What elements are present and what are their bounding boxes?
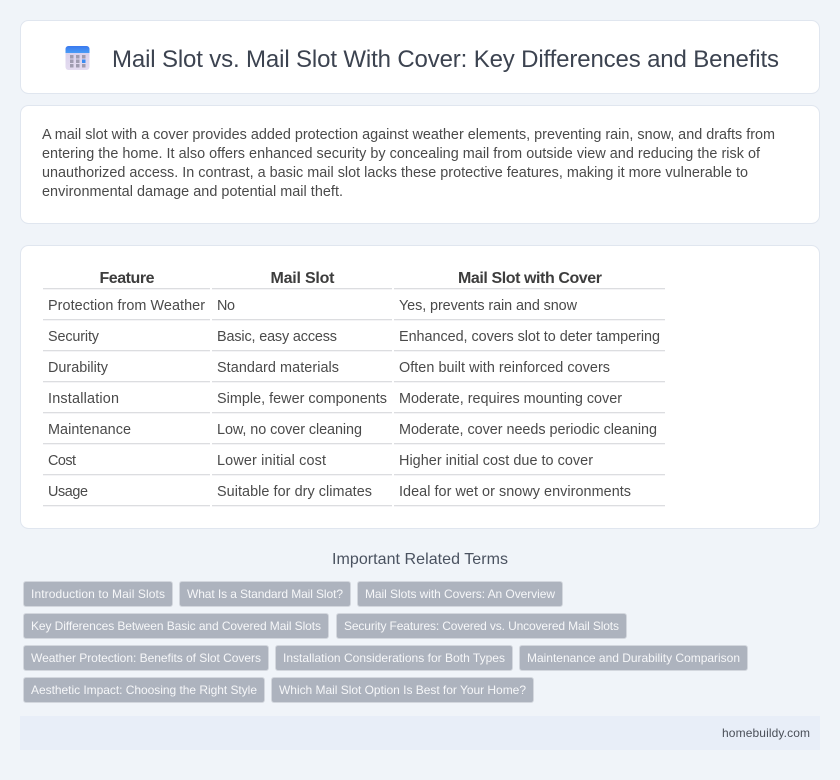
panel: intro text: unauthorized access. In contrast, a basic mail slot lacks these protective features, making it more vulnerable to <box>42 165 748 181</box>
row: security: Basic, easy access <box>217 329 337 345</box>
row: security: Enhanced, covers slot to deter tampering <box>399 329 660 345</box>
table header: Feature <box>100 270 155 287</box>
tag: Installation Considerations for Both Types <box>283 651 505 665</box>
tag: Introduction to Mail Slots <box>31 587 165 601</box>
row: maintenance: Low, no cover cleaning <box>217 422 362 438</box>
row: usage: Ideal for wet or snowy environments <box>399 484 631 500</box>
row: cost: Lower initial cost <box>217 453 326 469</box>
table header: Mail Slot <box>270 270 335 287</box>
row: maintenance: Maintenance <box>48 422 131 438</box>
icon: calendar <box>66 46 90 70</box>
panel: intro text: environmental damage and potential mail theft. <box>42 184 343 200</box>
tag <box>276 646 512 670</box>
footer <box>20 716 820 750</box>
row: installation: Installation <box>48 391 119 407</box>
tag: Maintenance and Durability Comparison <box>527 651 740 665</box>
tag <box>180 582 350 606</box>
tag: Weather Protection: Benefits of Slot Covers <box>31 651 261 665</box>
tag: Mail Slots with Covers: An Overview <box>365 587 555 601</box>
row: security: Security <box>48 329 100 345</box>
row: cost: Higher initial cost due to cover <box>399 453 593 469</box>
tag: Key Differences Between Basic and Covered Mail Slots <box>31 619 321 633</box>
tag: Aesthetic Impact: Choosing the Right Style <box>31 683 257 697</box>
row: usage: Usage <box>48 484 88 500</box>
table header: Mail Slot with Cover <box>458 270 602 287</box>
row: durability <box>48 360 610 376</box>
row: durability: Durability <box>48 360 109 376</box>
panel: header <box>20 20 820 94</box>
tag <box>24 582 172 606</box>
tag <box>24 678 264 702</box>
row: cost: Cost <box>48 453 76 469</box>
row: installation: Moderate, requires mounting cover <box>399 391 622 407</box>
table rules <box>43 288 665 506</box>
row: protection from weather: No <box>217 298 235 314</box>
row: usage: Suitable for dry climates <box>217 484 372 500</box>
row: maintenance: Moderate, cover needs periodic cleaning <box>399 422 657 438</box>
row: usage <box>48 484 631 500</box>
table header <box>100 270 602 287</box>
tag <box>24 646 268 670</box>
tag <box>272 678 534 702</box>
tag <box>24 614 328 638</box>
row: maintenance <box>48 422 657 438</box>
tag: What Is a Standard Mail Slot? <box>187 587 343 601</box>
row: protection from weather: Protection from Weather <box>48 298 205 314</box>
row: durability: Standard materials <box>217 360 339 376</box>
panel: intro text: entering the home. It also offers enhanced security by concealing mail from outside view and reducing the risk of <box>42 146 761 162</box>
footer: homebuildy.com <box>722 726 810 740</box>
tag <box>336 614 626 638</box>
panel: intro text: A mail slot with a cover provides added protection against weather elements, preventing rain, snow, and drafts from <box>42 127 775 143</box>
tag <box>358 582 562 606</box>
row: installation <box>48 391 622 407</box>
tag: Which Mail Slot Option Is Best for Your Home? <box>279 683 526 697</box>
row: durability: Often built with reinforced covers <box>399 360 610 376</box>
panel: comparison table <box>20 246 820 528</box>
row: protection from weather: Yes, prevents rain and snow <box>399 298 578 314</box>
row: protection from weather <box>48 298 578 314</box>
tag <box>520 646 748 670</box>
title: Mail Slot vs. Mail Slot With Cover: Key Differences and Benefits <box>112 46 779 73</box>
row: security <box>48 329 660 345</box>
row: cost <box>48 453 593 469</box>
related term tags <box>24 582 748 702</box>
panel: intro text <box>20 106 820 224</box>
heading: related terms: Important Related Terms <box>332 551 508 568</box>
row: installation: Simple, fewer components <box>217 391 387 407</box>
tag: Security Features: Covered vs. Uncovered Mail Slots <box>344 619 619 633</box>
